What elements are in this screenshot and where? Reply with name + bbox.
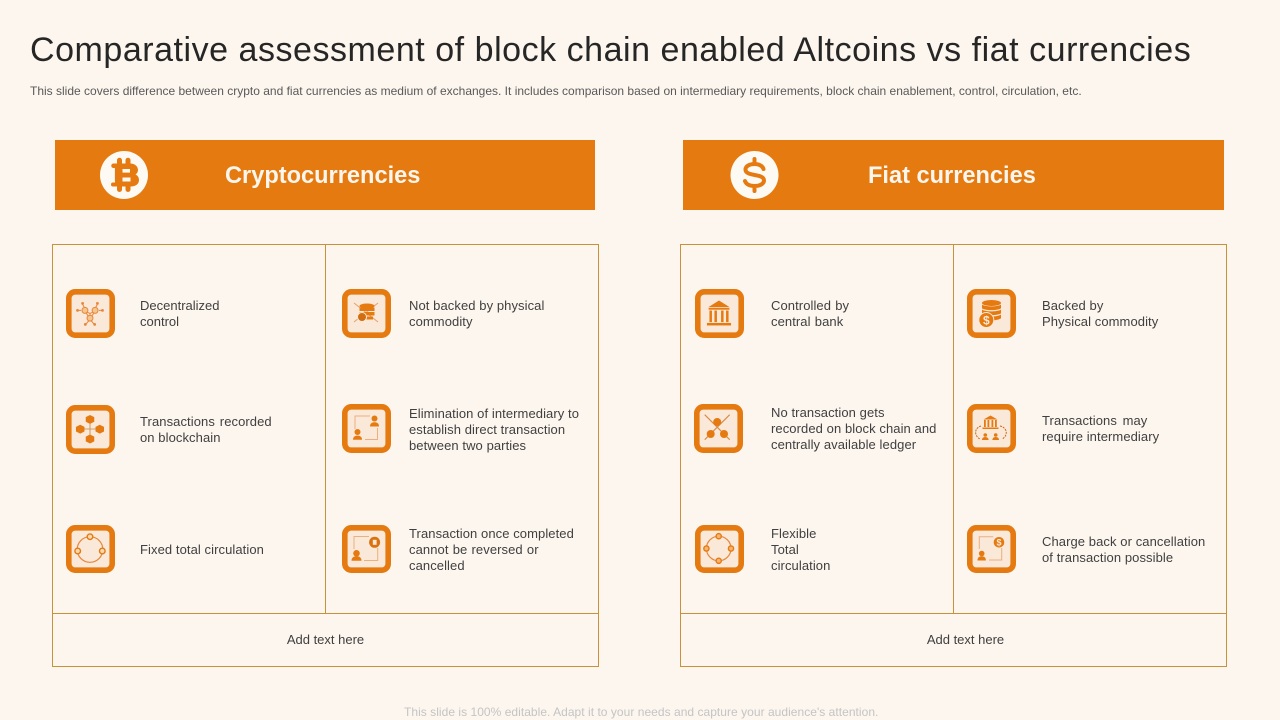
text: transaction cannot be reversed xyxy=(409,526,574,573)
heading: cryptocurrencies: Cryptocurrencies xyxy=(225,163,420,189)
text: transactions recorded on blockchain: Transactions recorded xyxy=(140,414,272,429)
text: transactions recorded on blockchain: on blockchain xyxy=(140,430,221,445)
footer text: fiat add text: Add text here xyxy=(927,632,1004,647)
text: transaction cannot be reversed: Transaction once completed xyxy=(409,526,574,541)
icon: central bank xyxy=(695,289,744,338)
text: not backed by physical commodity: Not backed by physical xyxy=(409,298,544,313)
text: backed by physical commodity xyxy=(1042,298,1158,329)
icon: charge back dollar xyxy=(967,525,1016,573)
icon: blockchain cubes xyxy=(66,405,115,454)
icon: irreversible bitcoin transaction xyxy=(342,525,391,573)
icon: intermediary bank xyxy=(967,404,1016,453)
heading: fiat currencies: Fiat currencies xyxy=(868,163,1036,189)
text: transaction cannot be reversed: cancelled xyxy=(409,558,465,573)
text: transactions may require intermediary: require intermediary xyxy=(1042,429,1159,444)
text: transactions recorded on blockchain xyxy=(140,414,272,445)
text: elimination of intermediary: Elimination of intermediary to xyxy=(409,406,579,421)
text: flexible total circulation: Total xyxy=(771,542,799,557)
text: transactions may require intermediary xyxy=(1042,413,1160,444)
icon: dollar coin xyxy=(730,151,778,199)
text: flexible total circulation: Flexible xyxy=(771,526,816,541)
text: controlled by central bank: central bank xyxy=(771,314,843,329)
icon: flexible circulation xyxy=(695,525,744,573)
text: not backed by physical commodity: commodity xyxy=(409,314,473,329)
text: elimination of intermediary: establish direct transaction xyxy=(409,422,565,437)
text: no transaction ledger: recorded on block chain and xyxy=(771,421,936,436)
text: decentralized control: Decentralized xyxy=(140,298,220,313)
text: charge back or cancellation xyxy=(1042,534,1205,565)
icon: no ledger xyxy=(694,404,743,453)
panel header: cryptocurrencies xyxy=(55,140,595,210)
text: no transaction ledger xyxy=(771,405,936,452)
text: controlled by central bank: Controlled by xyxy=(771,298,849,313)
text: backed by physical commodity: Physical commodity xyxy=(1042,314,1158,329)
footer note: This slide is 100% editable. Adapt it to your needs and capture your audience's attention. xyxy=(404,705,878,719)
icon: charge back dollar: $ xyxy=(996,538,1002,548)
text: flexible total circulation xyxy=(771,526,830,573)
text: no transaction ledger: centrally available ledger xyxy=(771,437,916,452)
text: flexible total circulation: circulation xyxy=(771,558,830,573)
icon: decentralized network xyxy=(66,289,115,338)
icon: fixed circulation xyxy=(66,525,115,573)
text: elimination of intermediary: between two parties xyxy=(409,438,526,453)
text: transactions may require intermediary: Transactions may xyxy=(1042,413,1147,428)
text: fixed total circulation: Fixed total circulation xyxy=(140,542,264,557)
subtitle text: This slide covers difference between crypto and fiat currencies as medium of exchanges. It includes comparison based on intermediary requirements, block chain enablement, control, circulation, etc. xyxy=(30,84,1082,98)
text: not backed by physical commodity xyxy=(409,298,544,329)
title: Comparative assessment of block chain enabled Altcoins vs fiat currencies xyxy=(30,31,1191,69)
text: decentralized control: control xyxy=(140,314,179,329)
panel header: fiat currencies xyxy=(683,140,1224,210)
text: no transaction ledger: No transaction gets xyxy=(771,405,885,420)
text: decentralized control xyxy=(140,298,220,329)
icon: not backed by commodity xyxy=(342,289,391,338)
panel: cryptocurrencies table xyxy=(52,244,599,667)
text: transaction cannot be reversed: cannot be reversed or xyxy=(409,542,539,557)
footer text: crypto add text: Add text here xyxy=(287,632,364,647)
text: charge back or cancellation: of transaction possible xyxy=(1042,550,1173,565)
icon: elimination of intermediary xyxy=(342,404,391,453)
text: controlled by central bank xyxy=(771,298,849,329)
text: backed by physical commodity: Backed by xyxy=(1042,298,1103,313)
icon: backed by physical commodity: $ xyxy=(983,313,990,327)
text: charge back or cancellation: Charge back or cancellation xyxy=(1042,534,1205,549)
icon: backed by physical commodity xyxy=(967,289,1016,338)
text: elimination of intermediary xyxy=(409,406,579,453)
panel: fiat table xyxy=(680,244,1227,667)
icon: bitcoin coin xyxy=(100,151,148,199)
